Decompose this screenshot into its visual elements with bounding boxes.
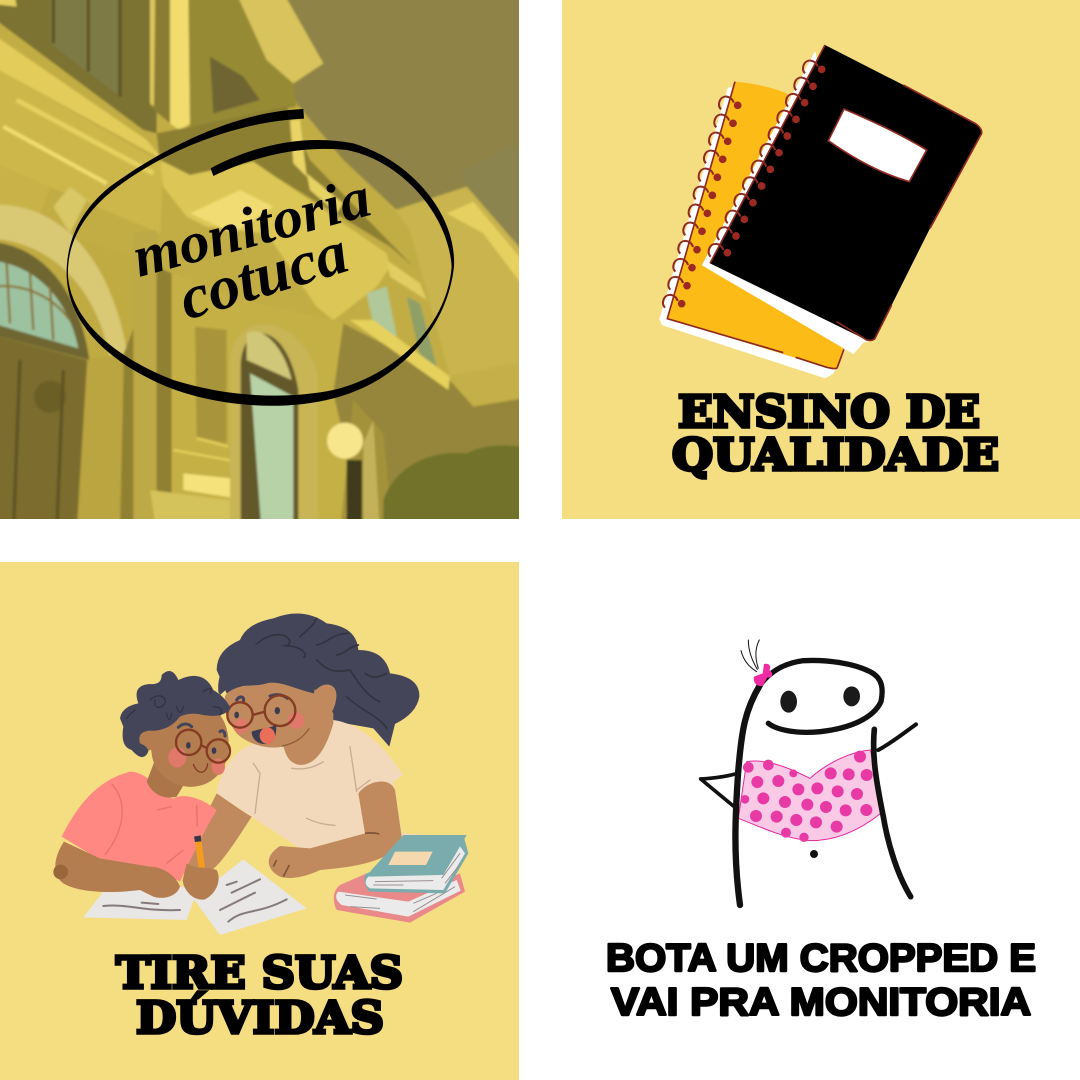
stack of books <box>334 873 465 923</box>
illustration: flork in pink cropped top <box>701 640 916 905</box>
hand-drawn circle swash <box>67 109 454 406</box>
heading: tire suas duvidas: DÚVIDAS <box>136 991 384 1044</box>
boy face <box>148 708 229 787</box>
spiral rings <box>663 61 825 308</box>
boy arm <box>55 842 180 898</box>
panel: tire suas duvidas <box>0 562 519 1080</box>
tutor hair <box>217 614 419 747</box>
title: monitoria cotuca: cotuca <box>171 218 356 333</box>
boy hair <box>120 671 231 757</box>
panel background <box>0 562 519 1080</box>
tutor face <box>225 682 333 765</box>
heading: ensino de qualidade: ENSINO DE <box>678 387 980 438</box>
panel: building photo with title <box>0 0 533 533</box>
panel: bota um cropped <box>606 640 1036 1024</box>
tutor shirt <box>217 720 427 848</box>
photo: illuminated building at night <box>0 0 533 533</box>
heading: ensino de qualidade <box>672 387 999 481</box>
heading: bota um cropped e vai pra monitoria <box>606 937 1036 1024</box>
heading: tire suas duvidas: TIRE SUAS <box>116 948 403 999</box>
heading: ensino de qualidade: QUALIDADE <box>672 430 999 481</box>
boy shirt <box>62 772 217 882</box>
tutor arm and hand <box>269 782 402 878</box>
pencil and hand <box>194 836 205 868</box>
heading: tire suas duvidas <box>116 948 403 1044</box>
papers <box>83 859 307 935</box>
icon: spiral notebooks <box>660 45 982 378</box>
panel background <box>562 0 1080 519</box>
heading: bota um cropped e vai pra monitoria: VAI PRA MONITORIA <box>611 981 1031 1024</box>
title: monitoria cotuca: monitoria <box>126 164 377 290</box>
heading: bota um cropped e vai pra monitoria: BOTA UM CROPPED E <box>606 937 1036 980</box>
panel: ensino de qualidade <box>562 0 1080 519</box>
illustration: student and tutor studying <box>53 614 468 935</box>
